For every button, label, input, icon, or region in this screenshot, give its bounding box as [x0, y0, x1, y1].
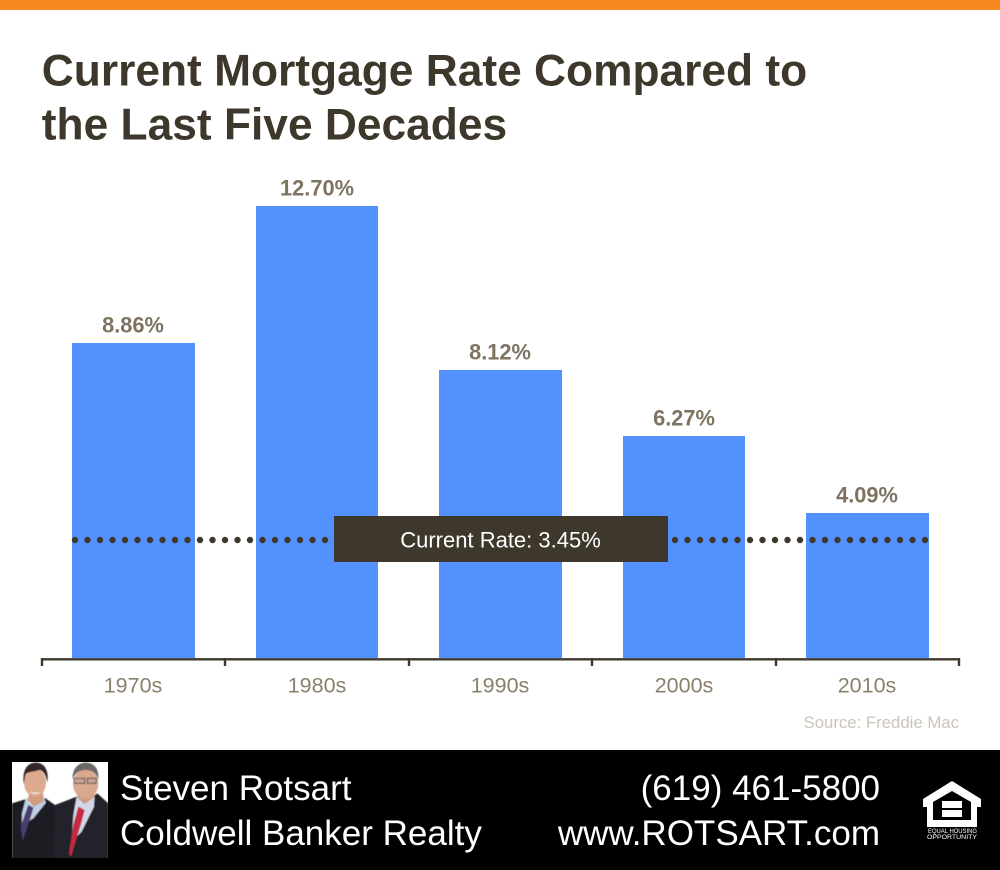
value labels: 8.12%: [469, 340, 531, 364]
value labels: [102, 176, 898, 508]
axis labels: [104, 674, 896, 698]
axis labels: 1980s: [288, 674, 346, 698]
title: Current Mortgage Rate Compared to: [42, 46, 807, 96]
bars: [72, 206, 929, 658]
value labels: 6.27%: [653, 406, 715, 430]
left agent: [12, 763, 60, 860]
title: [42, 46, 807, 150]
axis labels: 2010s: [838, 674, 896, 698]
current rate callout: Current Rate: 3.45%: [400, 528, 601, 552]
phone and website: [557, 769, 880, 853]
value labels: 8.86%: [102, 312, 164, 338]
agent name and company: Coldwell Banker Realty: [120, 814, 482, 853]
agent name and company: Steven Rotsart: [120, 769, 352, 808]
top orange band: [0, 0, 1000, 10]
source note: Source: Freddie Mac: [804, 713, 959, 732]
value labels: 4.09%: [836, 482, 898, 508]
phone and website: www.ROTSART.com: [557, 814, 880, 853]
icon: equal housing opportunity: OPPORTUNITY: [927, 834, 977, 841]
current rate callout: [334, 516, 668, 562]
bar chart: [41, 176, 960, 698]
axis labels: 1970s: [104, 674, 162, 698]
footer band: [0, 750, 1000, 870]
phone and website: (619) 461-5800: [641, 769, 880, 808]
icon: equal housing opportunity: EQUAL HOUSING: [928, 828, 977, 835]
right agent: [53, 763, 108, 860]
x axis: [41, 658, 960, 666]
icon: equal housing opportunity: [923, 781, 981, 841]
current rate dotted line: [75, 537, 926, 543]
title: the Last Five Decades: [42, 100, 507, 150]
value labels: 12.70%: [280, 176, 354, 200]
axis labels: 2000s: [655, 674, 713, 698]
agent photo: [12, 762, 108, 860]
agent name and company: [120, 769, 482, 853]
axis labels: 1990s: [471, 674, 529, 698]
